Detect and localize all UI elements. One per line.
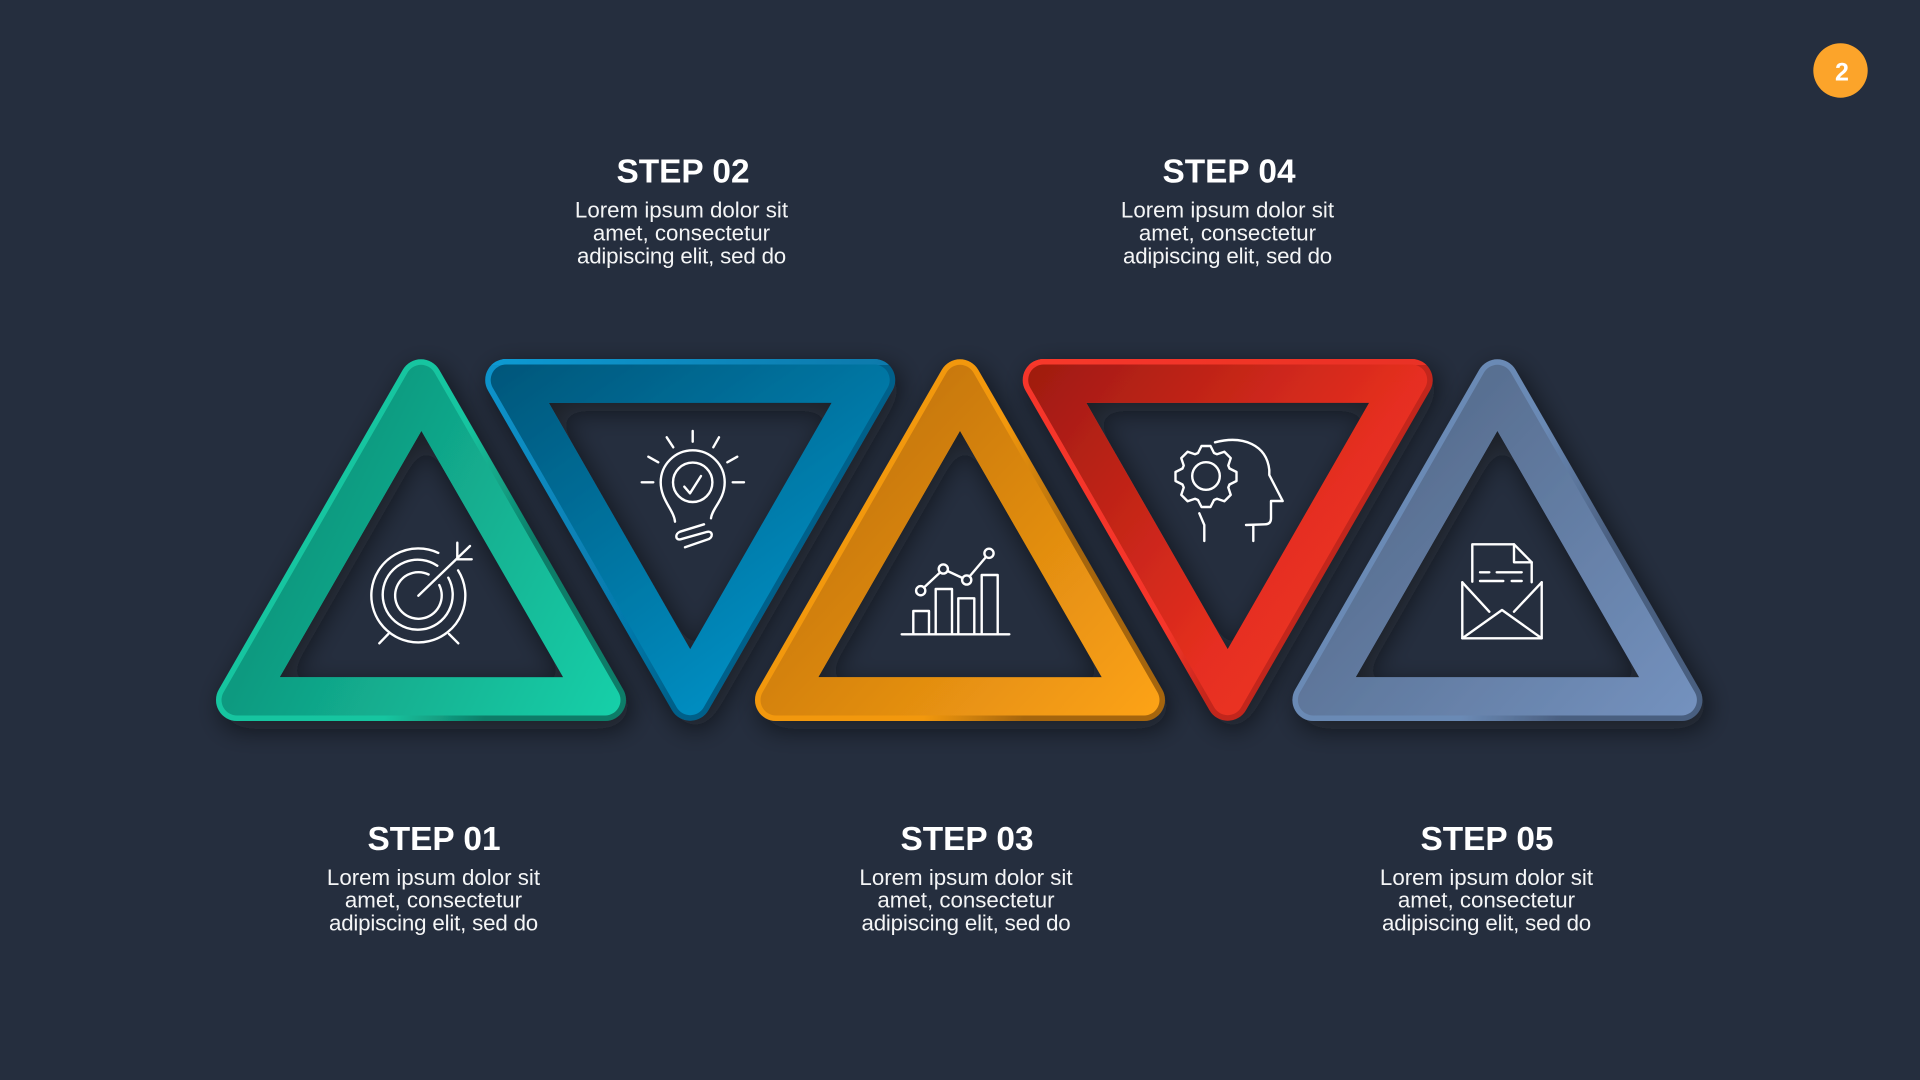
face: [761, 365, 1159, 716]
description: Lorem ipsum dolor sit: [1121, 198, 1335, 223]
description: [1380, 865, 1594, 936]
icon: light bulb with check: [642, 431, 744, 547]
description: amet, consectetur: [1398, 888, 1576, 913]
heading: STEP 03: [900, 821, 1034, 858]
triangle step 04 red: [1023, 359, 1433, 721]
description: adipiscing elit, sed do: [329, 911, 538, 936]
description: adipiscing elit, sed do: [861, 911, 1071, 936]
description: Lorem ipsum dolor sit: [1380, 865, 1594, 890]
icon: target with arrow: [371, 543, 472, 643]
face: [1298, 365, 1697, 716]
rim: [1292, 359, 1702, 721]
face: [1028, 364, 1427, 715]
description: Lorem ipsum dolor sit: [575, 198, 789, 223]
description: amet, consectetur: [877, 888, 1055, 913]
face: [491, 364, 890, 715]
rim: [755, 359, 1165, 721]
heading: STEP 02: [616, 154, 750, 191]
description: adipiscing elit, sed do: [1382, 911, 1591, 936]
text: step 03: [859, 821, 1073, 936]
icon: head with gear: [1176, 440, 1283, 541]
description: amet, consectetur: [345, 888, 523, 913]
description: amet, consectetur: [1139, 220, 1317, 245]
description: Lorem ipsum dolor sit: [327, 865, 541, 890]
triangle step 01 green: [216, 359, 626, 721]
description: Lorem ipsum dolor sit: [859, 865, 1073, 890]
text: step 04: [1121, 154, 1335, 268]
text: step 02: [575, 154, 789, 268]
rim: [216, 359, 626, 721]
page number badge: 2: [1835, 59, 1849, 87]
description: [575, 198, 789, 268]
description: [1121, 198, 1335, 268]
top rim band: [1029, 359, 1434, 402]
description: amet, consectetur: [593, 220, 771, 245]
triangle step 02 blue: [485, 359, 895, 721]
icon: bar chart with trend line: [902, 549, 1009, 634]
text: step 05: [1380, 821, 1594, 936]
heading: STEP 05: [1420, 821, 1554, 858]
description: adipiscing elit, sed do: [577, 243, 786, 268]
rim: [485, 359, 895, 721]
heading: STEP 01: [367, 821, 501, 858]
rim: [1023, 359, 1433, 721]
description: [859, 865, 1073, 936]
description: [327, 865, 541, 936]
text: step 01: [327, 821, 541, 936]
page number badge: [1813, 43, 1868, 98]
face: [222, 365, 620, 716]
triangle step 05 slate blue: [1292, 359, 1702, 721]
description: adipiscing elit, sed do: [1123, 243, 1332, 268]
icon: envelope with document: [1462, 544, 1542, 638]
heading: STEP 04: [1162, 154, 1296, 191]
top rim band: [492, 359, 896, 385]
triangle step 03 orange: [755, 359, 1165, 721]
